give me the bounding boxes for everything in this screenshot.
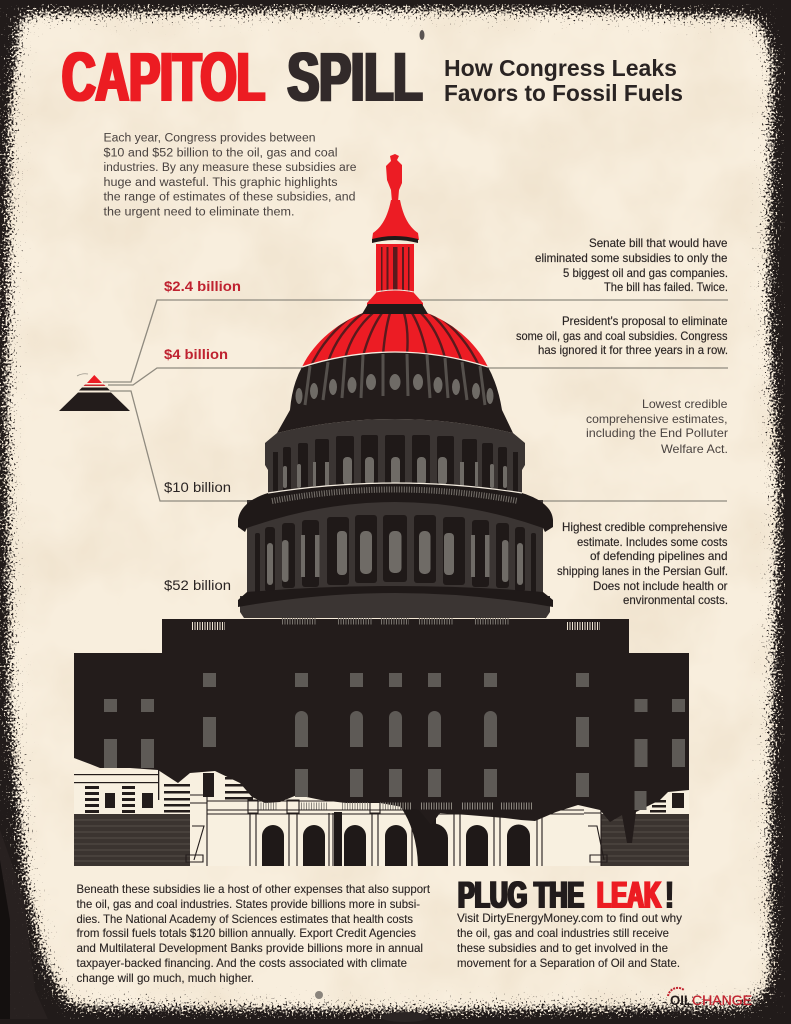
lantern base <box>367 290 423 307</box>
intro text <box>104 132 356 218</box>
left body text: the oil, gas and coal industries. States provide billions more in subsi- <box>76 897 420 911</box>
intro text: huge and wasteful. This graphic highlights <box>104 177 338 189</box>
call to action text: these subsidies and to get involved in the <box>457 941 668 955</box>
heading: plug the leak: LEAK <box>597 874 661 916</box>
left body text: taxpayer-backed financing. And the costs associated with climate <box>76 956 407 970</box>
note: highest estimate: environmental costs. <box>623 594 728 607</box>
left body text: change will go much, much higher. <box>76 971 254 985</box>
note: highest estimate: of defending pipelines and <box>590 550 728 563</box>
subtitle: How Congress Leaks <box>444 55 677 81</box>
logo: oil change international: INTERNATIONAL <box>672 1007 753 1012</box>
oil spill building mass <box>74 619 689 843</box>
heading: plug the leak: PLUG THE <box>458 874 584 916</box>
note: president's proposal: President's proposal to eliminate <box>562 315 728 328</box>
piers and balustrade <box>186 795 607 866</box>
dome lantern <box>362 154 428 314</box>
call to action text: Visit DirtyEnergyMoney.com to find out why <box>457 911 682 925</box>
value label: 10 billion: $10 billion <box>164 480 231 495</box>
intro text: industries. By any measure these subsidies are <box>104 162 356 174</box>
upper drum body <box>265 419 525 497</box>
left body text: dies. The National Academy of Sciences estimates that health costs <box>76 912 413 926</box>
white line on dome <box>302 352 488 367</box>
value label: 4 billion: $4 billion <box>164 347 228 362</box>
heading: plug the leak: ! <box>666 874 673 916</box>
left body text: from fossil fuels totals $120 billion annually. Export Credit Agencies <box>76 926 416 940</box>
note: highest estimate: Does not include health or <box>593 580 728 593</box>
lantern cap <box>372 200 419 240</box>
right wing details <box>650 793 684 812</box>
upper windows <box>283 457 507 488</box>
call to action text: the oil, gas and coal industries still receive <box>457 926 669 940</box>
note: president's proposal <box>516 315 728 357</box>
dome oval windows <box>296 374 494 404</box>
lantern colonnade <box>376 244 414 294</box>
drum body <box>247 500 543 597</box>
note: highest estimate: estimate. Includes some costs <box>577 536 728 549</box>
left body text <box>76 882 431 985</box>
note: lowest estimate: Welfare Act. <box>661 443 728 456</box>
lower drum of dome <box>238 500 553 618</box>
subtitle <box>444 55 683 106</box>
note: highest estimate <box>557 521 728 607</box>
note: lowest estimate: comprehensive estimates, <box>586 413 728 426</box>
logo: oil change international: CHANGE <box>692 992 752 1008</box>
note: senate bill <box>535 237 728 294</box>
note: lowest estimate: Lowest credible <box>642 398 728 411</box>
connector lines <box>103 300 728 501</box>
right stairs <box>601 814 689 866</box>
building windows <box>104 673 685 810</box>
drum windows <box>267 531 523 585</box>
note: senate bill: Senate bill that would have <box>589 237 728 250</box>
left body text: and Multilateral Development Banks provide billions more in annual <box>76 941 423 955</box>
note: lowest estimate: including the End Polluter <box>586 427 728 440</box>
note: highest estimate: shipping lanes in the Persian Gulf. <box>557 565 728 578</box>
title: Spill: SPILL <box>288 38 422 116</box>
lower building facade <box>74 770 689 866</box>
value label: 52 billion: $52 billion <box>164 578 231 593</box>
note: senate bill: The bill has failed. Twice. <box>604 281 728 294</box>
note: lowest estimate <box>586 398 728 456</box>
call to action text <box>457 911 682 970</box>
left body text: Beneath these subsidies lie a host of other expenses that also support <box>76 882 431 896</box>
intro text: the urgent need to eliminate them. <box>104 206 294 218</box>
left stairs <box>74 814 190 866</box>
note: senate bill: eliminated some subsidies to only the <box>535 252 728 265</box>
call to action text: movement for a Separation of Oil and State. <box>457 956 680 970</box>
value label: 2.4 billion: $2.4 billion <box>164 279 241 294</box>
red dome ribs <box>310 313 480 368</box>
title <box>62 38 422 116</box>
drum bays <box>255 515 536 595</box>
dome ribs <box>305 354 485 405</box>
intro text: the range of estimates of these subsidies, and <box>104 192 356 204</box>
note: president's proposal: has ignored it for three years in a row. <box>538 344 728 357</box>
dome dark section <box>277 352 513 433</box>
black collar <box>362 304 428 314</box>
upper bays <box>273 435 518 494</box>
left wing details <box>74 770 253 813</box>
upper band with white edge <box>238 483 553 532</box>
drum base <box>240 596 550 618</box>
icon: pyramid key <box>59 374 130 411</box>
logo: oil change international: OIL <box>670 992 692 1008</box>
note: president's proposal: some oil, gas and coal subsidies. Congress <box>516 330 728 343</box>
dome red section <box>302 313 488 368</box>
note: highest estimate: Highest credible comprehensive <box>562 521 728 534</box>
intro text: $10 and $52 billion to the oil, gas and coal <box>104 148 338 160</box>
arches <box>262 806 530 866</box>
note: senate bill: 5 biggest oil and gas companies. <box>563 267 728 280</box>
balustrades on building <box>192 621 600 806</box>
subtitle: Favors to Fossil Fuels <box>444 80 683 106</box>
title: Capitol: CAPITOL <box>62 38 265 116</box>
intro text: Each year, Congress provides between <box>104 132 316 144</box>
logo: oil change international <box>668 988 753 1012</box>
drum ledge <box>238 586 553 607</box>
upper drum of dome <box>265 419 525 497</box>
statue <box>386 154 402 202</box>
